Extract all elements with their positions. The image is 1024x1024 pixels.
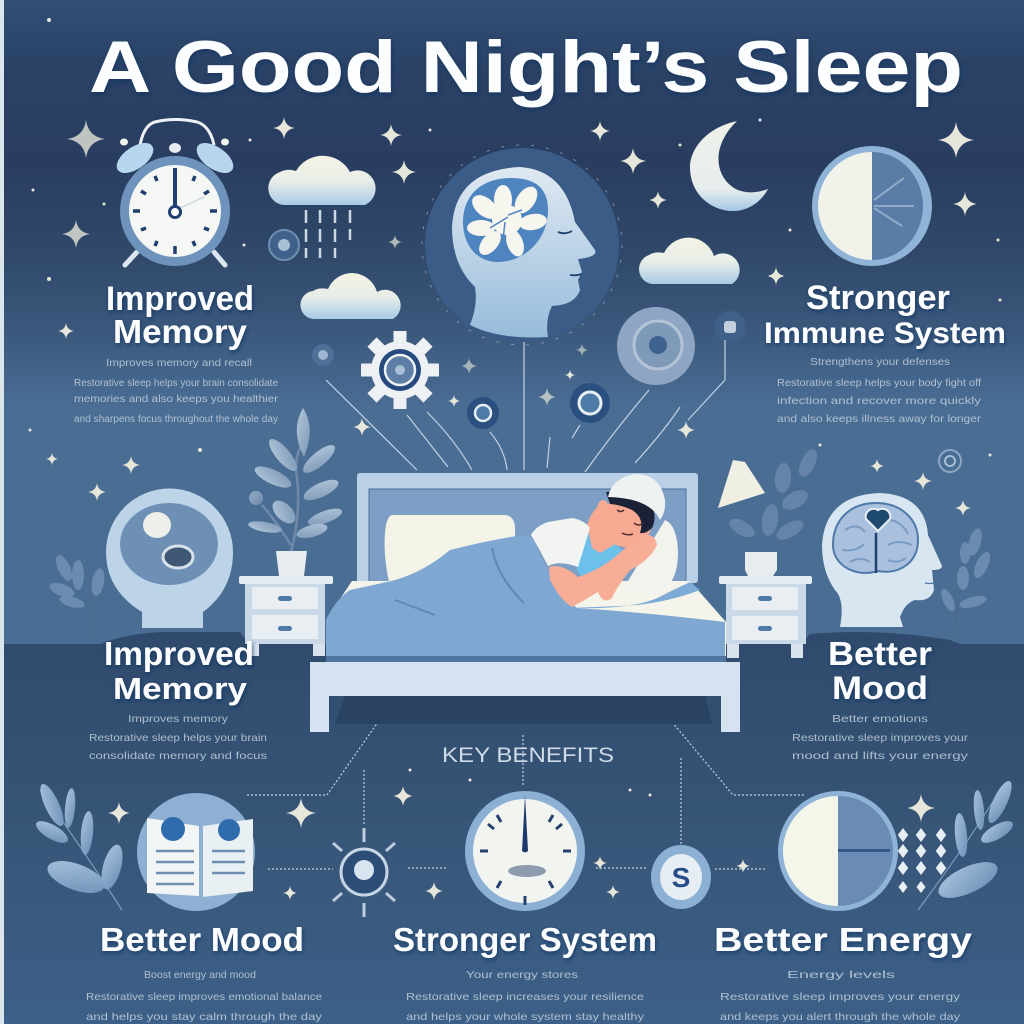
text block: better energy bottom: Energy levels bbox=[787, 969, 895, 981]
icon: half circle bottom bbox=[778, 791, 898, 911]
pillow left bbox=[385, 515, 515, 582]
text block: stronger immune system bbox=[764, 279, 1006, 425]
icons: small orbs bbox=[269, 230, 961, 472]
icon: half circle bbox=[812, 146, 932, 266]
text block: stronger system bottom: and helps your whole system stay healthy bbox=[406, 1011, 645, 1023]
text block: improved memory middle: Improves memory bbox=[128, 713, 229, 725]
icon: alarm clock bbox=[111, 120, 239, 266]
text block: better energy bottom: Restorative sleep improves your energy bbox=[720, 991, 961, 1003]
text block: better energy bottom bbox=[714, 921, 973, 1023]
icon: head with heart brain bbox=[822, 493, 942, 627]
blue sheet bbox=[570, 582, 700, 608]
text block: stronger immune system: Stronger bbox=[806, 279, 950, 317]
text block: stronger immune system: Immune System bbox=[764, 317, 1006, 350]
arm bbox=[549, 534, 657, 607]
text block: stronger system bottom: Restorative sleep increases your resilience bbox=[406, 991, 644, 1003]
text block: better mood middle: mood and lifts your energy bbox=[792, 750, 969, 762]
text block: improved memory middle bbox=[89, 635, 267, 762]
frame bbox=[310, 656, 740, 732]
text block: improved memory middle: Restorative sleep helps your brain bbox=[89, 732, 267, 744]
text block: better mood bottom: Better Mood bbox=[100, 921, 304, 958]
text block: better energy bottom: and keeps you alert through the whole day bbox=[720, 1011, 961, 1023]
text block: stronger immune system: Strengthens your defenses bbox=[810, 356, 950, 368]
text block: stronger immune system: infection and recover more quickly bbox=[777, 395, 982, 407]
bed with sleeping person bbox=[310, 473, 740, 732]
icon: brain ball left bbox=[106, 488, 233, 628]
icon: open book bbox=[137, 793, 255, 911]
text block: improved memory middle: Improved bbox=[104, 635, 254, 672]
under-bed shadow bbox=[335, 696, 712, 724]
text block: stronger immune system: Restorative sleep helps your body fight off bbox=[777, 377, 981, 389]
text block: better mood middle: Mood bbox=[832, 670, 928, 706]
icon: S coin: S bbox=[672, 862, 690, 893]
icon: gear bbox=[361, 331, 439, 409]
icon: leaves bottom left bbox=[33, 781, 127, 910]
text block: stronger system bottom: Your energy stores bbox=[466, 969, 578, 981]
text block: better mood middle: Better emotions bbox=[832, 713, 928, 725]
text block: improved memory top: Memory bbox=[113, 313, 248, 350]
key benefits label: KEY BENEFITS bbox=[442, 744, 614, 767]
icon: head with brain bbox=[422, 145, 622, 345]
pillow right bbox=[620, 520, 678, 597]
icon: clock bottom bbox=[465, 791, 585, 911]
icon: plant left bbox=[247, 408, 344, 576]
blanket bbox=[326, 535, 725, 657]
person bbox=[531, 474, 665, 590]
icon: leaves bottom right bbox=[918, 778, 1016, 910]
text block: stronger system bottom: Stronger System bbox=[393, 921, 657, 958]
text block: improved memory top bbox=[74, 280, 279, 425]
text block: improved memory top: memories and also keeps you healthier bbox=[74, 393, 279, 405]
text block: stronger immune system: and also keeps illness away for longer bbox=[777, 413, 982, 425]
nightstand right bbox=[719, 576, 812, 658]
text block: better mood middle: Restorative sleep improves your bbox=[792, 732, 969, 744]
text block: improved memory middle: consolidate memory and focus bbox=[89, 750, 267, 762]
icon: diamond dots bbox=[898, 828, 946, 893]
connection lines bbox=[247, 340, 805, 869]
icon: sun badge bbox=[333, 828, 395, 917]
icon: small cloud bbox=[300, 273, 401, 319]
title: A Good Night’s Sleep bbox=[89, 27, 963, 108]
text block: better mood bottom: and helps you stay calm through the day bbox=[86, 1011, 323, 1023]
text block: improved memory middle: Memory bbox=[113, 671, 248, 706]
text block: better mood middle bbox=[792, 635, 969, 762]
text block: stronger system bottom bbox=[393, 921, 657, 1023]
icon: plant right bbox=[726, 446, 821, 576]
text block: better mood bottom: Restorative sleep improves emotional balance bbox=[86, 991, 322, 1003]
text block: better mood bottom bbox=[86, 921, 323, 1023]
icon: small cloud right bbox=[639, 238, 740, 284]
plants on side bbox=[48, 527, 993, 642]
text block: better mood bottom: Boost energy and mood bbox=[144, 969, 256, 981]
nightstand left bbox=[239, 576, 333, 656]
icon: lamp bbox=[718, 460, 765, 508]
text block: improved memory top: Improved bbox=[106, 280, 254, 318]
mattress bbox=[326, 581, 726, 656]
text block: improved memory top: Improves memory and recall bbox=[106, 357, 252, 369]
text block: improved memory top: Restorative sleep helps your brain consolidate bbox=[74, 377, 278, 389]
icon: S coin bbox=[651, 845, 711, 909]
text block: better energy bottom: Better Energy bbox=[714, 921, 973, 958]
text block: better mood middle: Better bbox=[828, 635, 932, 672]
text block: improved memory top: and sharpens focus throughout the whole day bbox=[74, 413, 279, 425]
icon: rain cloud bbox=[268, 156, 376, 258]
icon: crescent moon bbox=[690, 121, 768, 211]
headboard bbox=[357, 473, 698, 589]
